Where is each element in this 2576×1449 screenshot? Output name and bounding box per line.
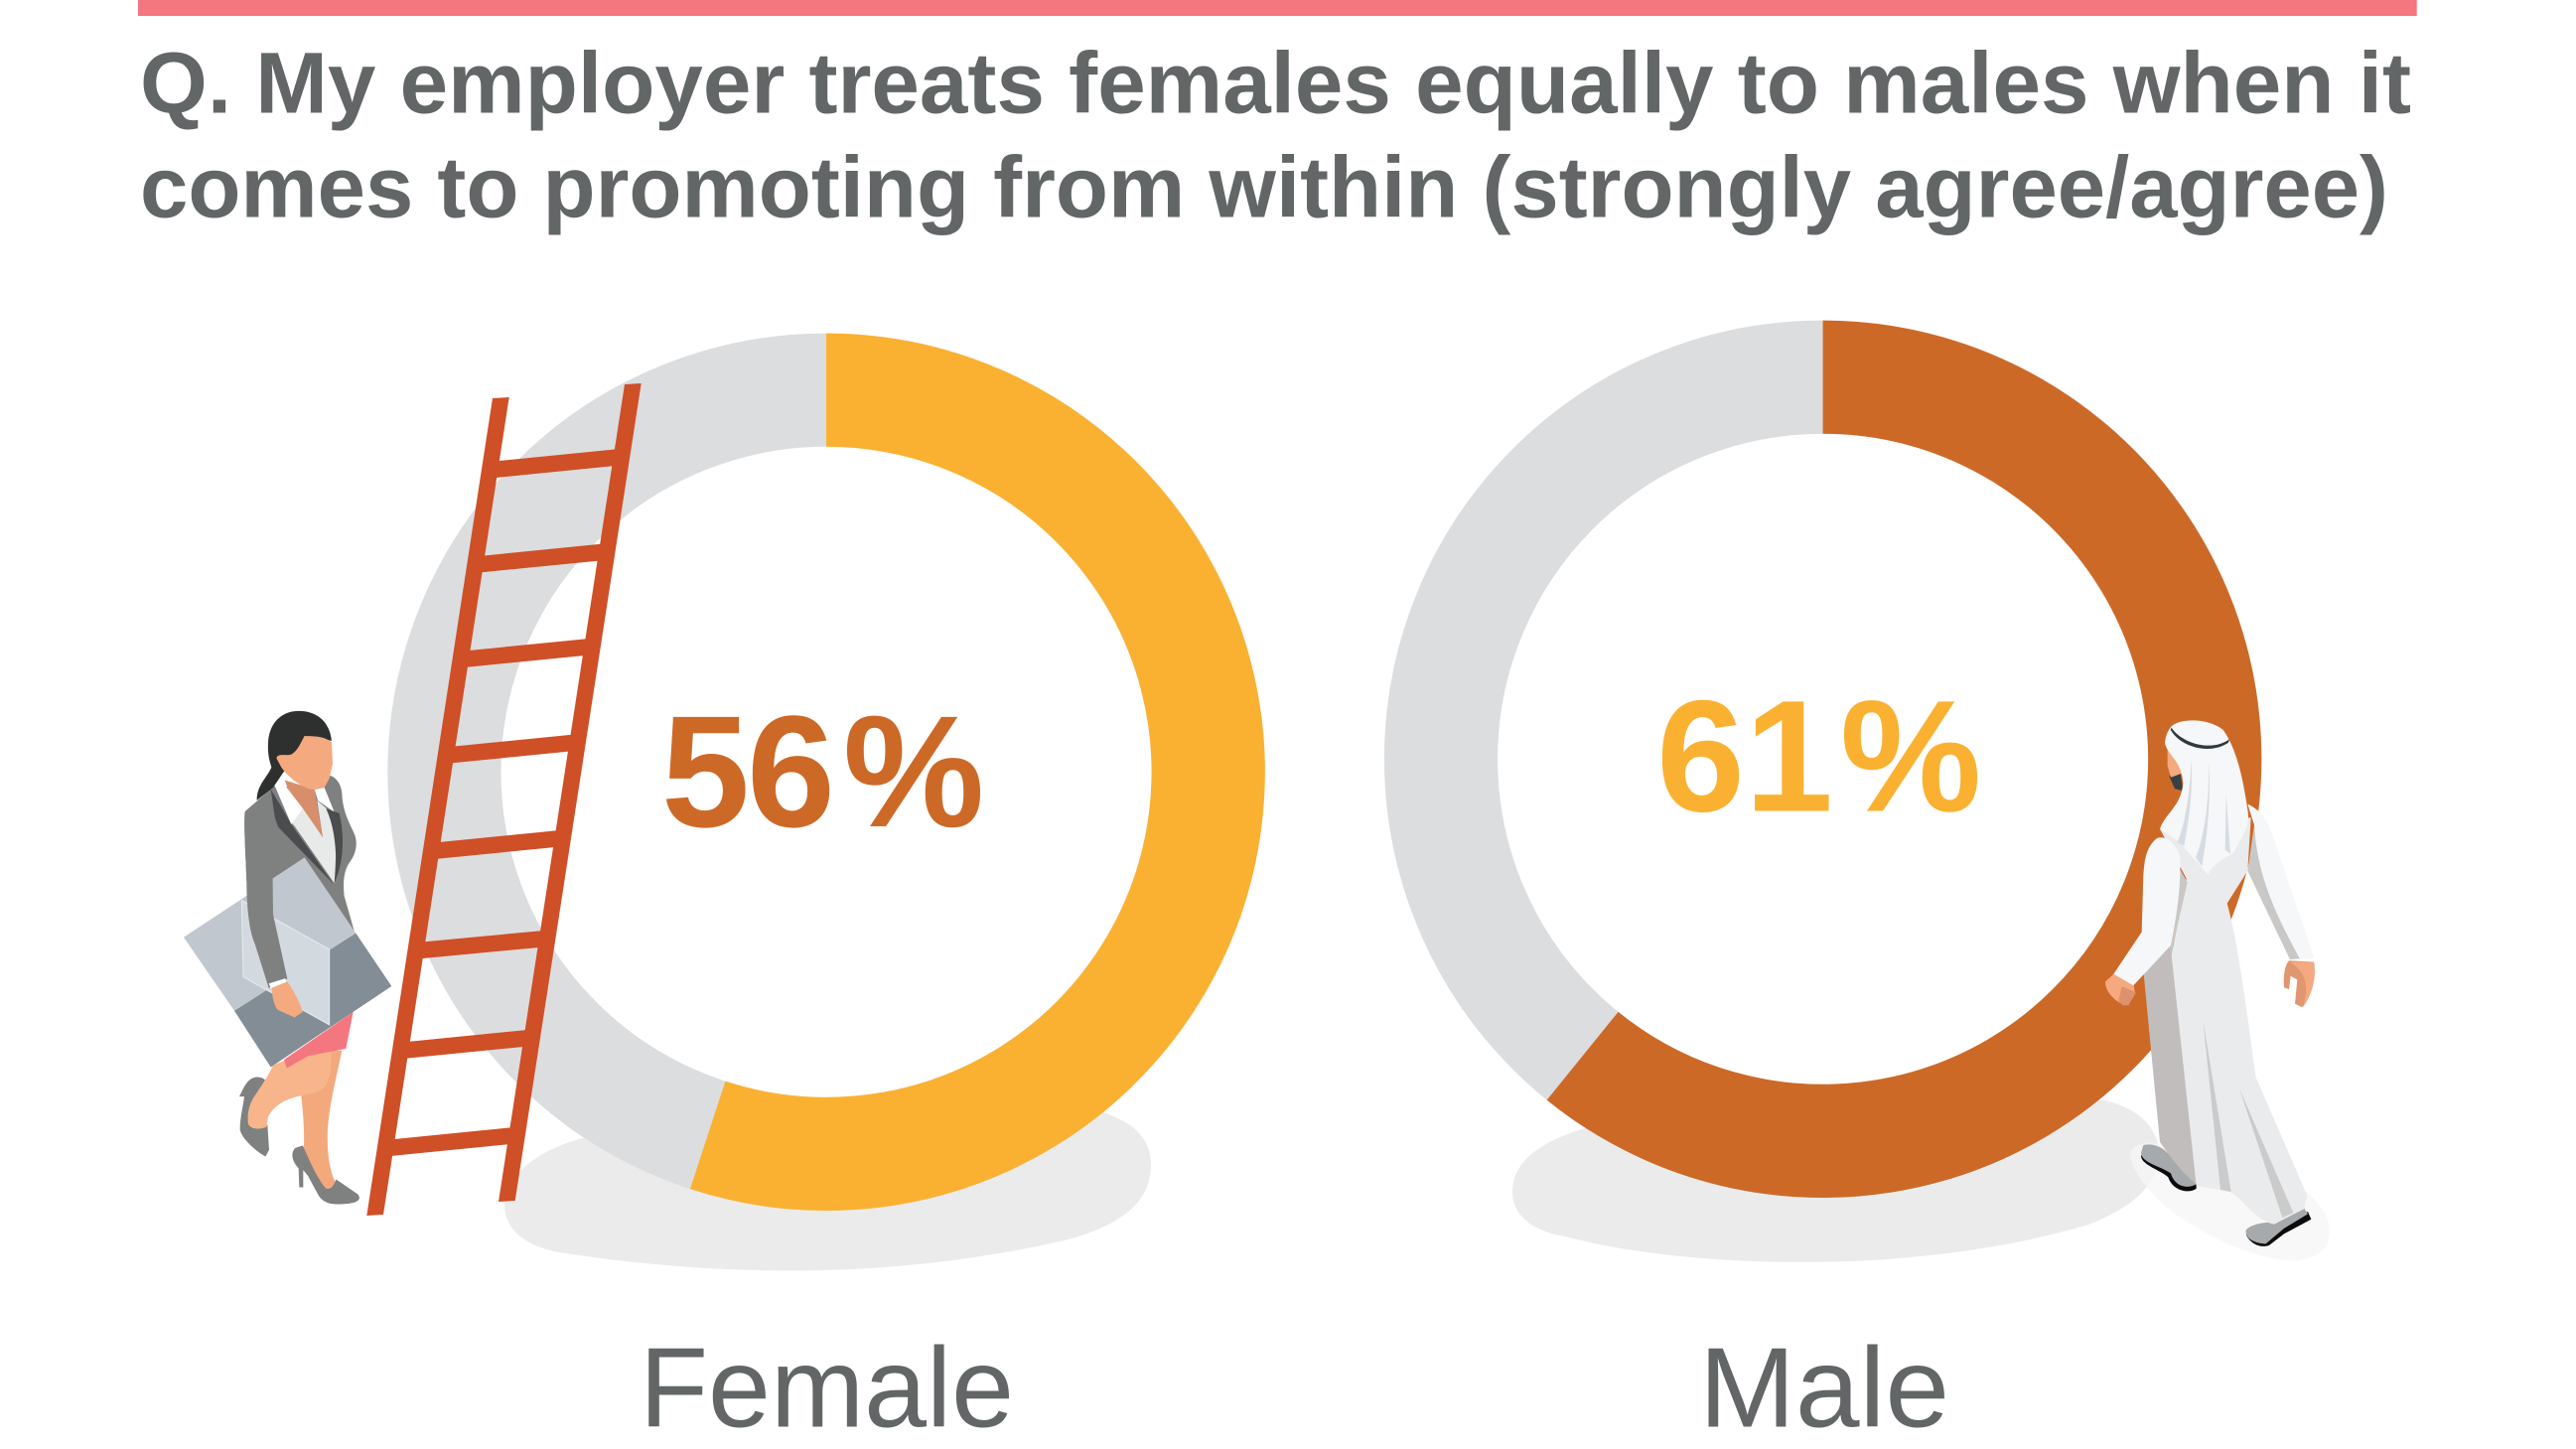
left hand <box>2105 974 2135 1005</box>
headband <box>2171 728 2229 749</box>
ground shadow: male <box>1512 1092 2160 1262</box>
donut value 56 percent <box>708 390 1209 1154</box>
panel: female donut chart <box>444 390 1209 1449</box>
face <box>2168 749 2182 778</box>
title: comes to promoting from within (strongly agree/agree) <box>140 139 2388 235</box>
ground shadow: female <box>504 1092 1151 1270</box>
title: Q. My employer treats females equally to males when it <box>140 35 2411 131</box>
category label: Female: Female <box>640 1326 1014 1449</box>
lapels <box>271 790 343 884</box>
raised leg <box>248 1051 331 1128</box>
left sleeve <box>2113 837 2180 985</box>
face <box>276 736 333 790</box>
sleeve <box>244 811 287 988</box>
front shoe <box>2246 1208 2308 1243</box>
collar <box>275 779 335 824</box>
right arm shade <box>2247 825 2300 959</box>
cuff <box>269 978 286 988</box>
thobe shaded side <box>2143 940 2197 1184</box>
value label: 56%: 56% <box>661 682 984 860</box>
title <box>140 35 2411 235</box>
shirt <box>291 800 337 883</box>
beard <box>2169 770 2183 791</box>
portfolio upper <box>184 857 356 1011</box>
category label: Male: Male <box>1699 1326 1949 1449</box>
thobe <box>2160 817 2307 1225</box>
laptop <box>241 901 330 1025</box>
back shoe <box>2141 1144 2197 1187</box>
hand <box>272 982 303 1017</box>
donut hole: female <box>494 439 1159 1104</box>
thobe folds <box>2203 1020 2293 1218</box>
standing shoe <box>292 1145 359 1205</box>
icon: businesswoman with portfolio <box>184 711 391 1205</box>
icon: ladder <box>366 383 642 1216</box>
donut value 61 percent <box>1583 377 2205 1141</box>
front shoe sole <box>2246 1212 2311 1246</box>
value label: 61%: 61% <box>1656 667 1981 844</box>
skirt <box>284 1012 354 1069</box>
headscarf folds <box>2178 760 2230 866</box>
donut track: female <box>444 390 1209 1154</box>
panel: male donut chart <box>1441 377 2205 1449</box>
portfolio lower <box>234 934 391 1067</box>
jacket body <box>244 776 357 933</box>
icon: man in white thobe <box>2105 720 2330 1260</box>
feet shadow <box>2130 1143 2330 1260</box>
right sleeve <box>2247 804 2315 958</box>
donut track: male <box>1441 377 2205 1141</box>
top accent bar <box>138 0 2417 16</box>
raised shoe <box>239 1077 269 1156</box>
neck <box>285 781 323 837</box>
right hand highlight <box>2290 961 2315 1007</box>
standing leg <box>301 1051 342 1191</box>
donut hole: male <box>1491 426 2156 1091</box>
left arm shade <box>2168 869 2188 949</box>
headscarf <box>2160 720 2248 875</box>
hair <box>257 711 332 800</box>
back shoe sole <box>2141 1152 2197 1191</box>
right hand <box>2284 960 2315 1007</box>
left hand shade <box>2118 986 2136 1005</box>
